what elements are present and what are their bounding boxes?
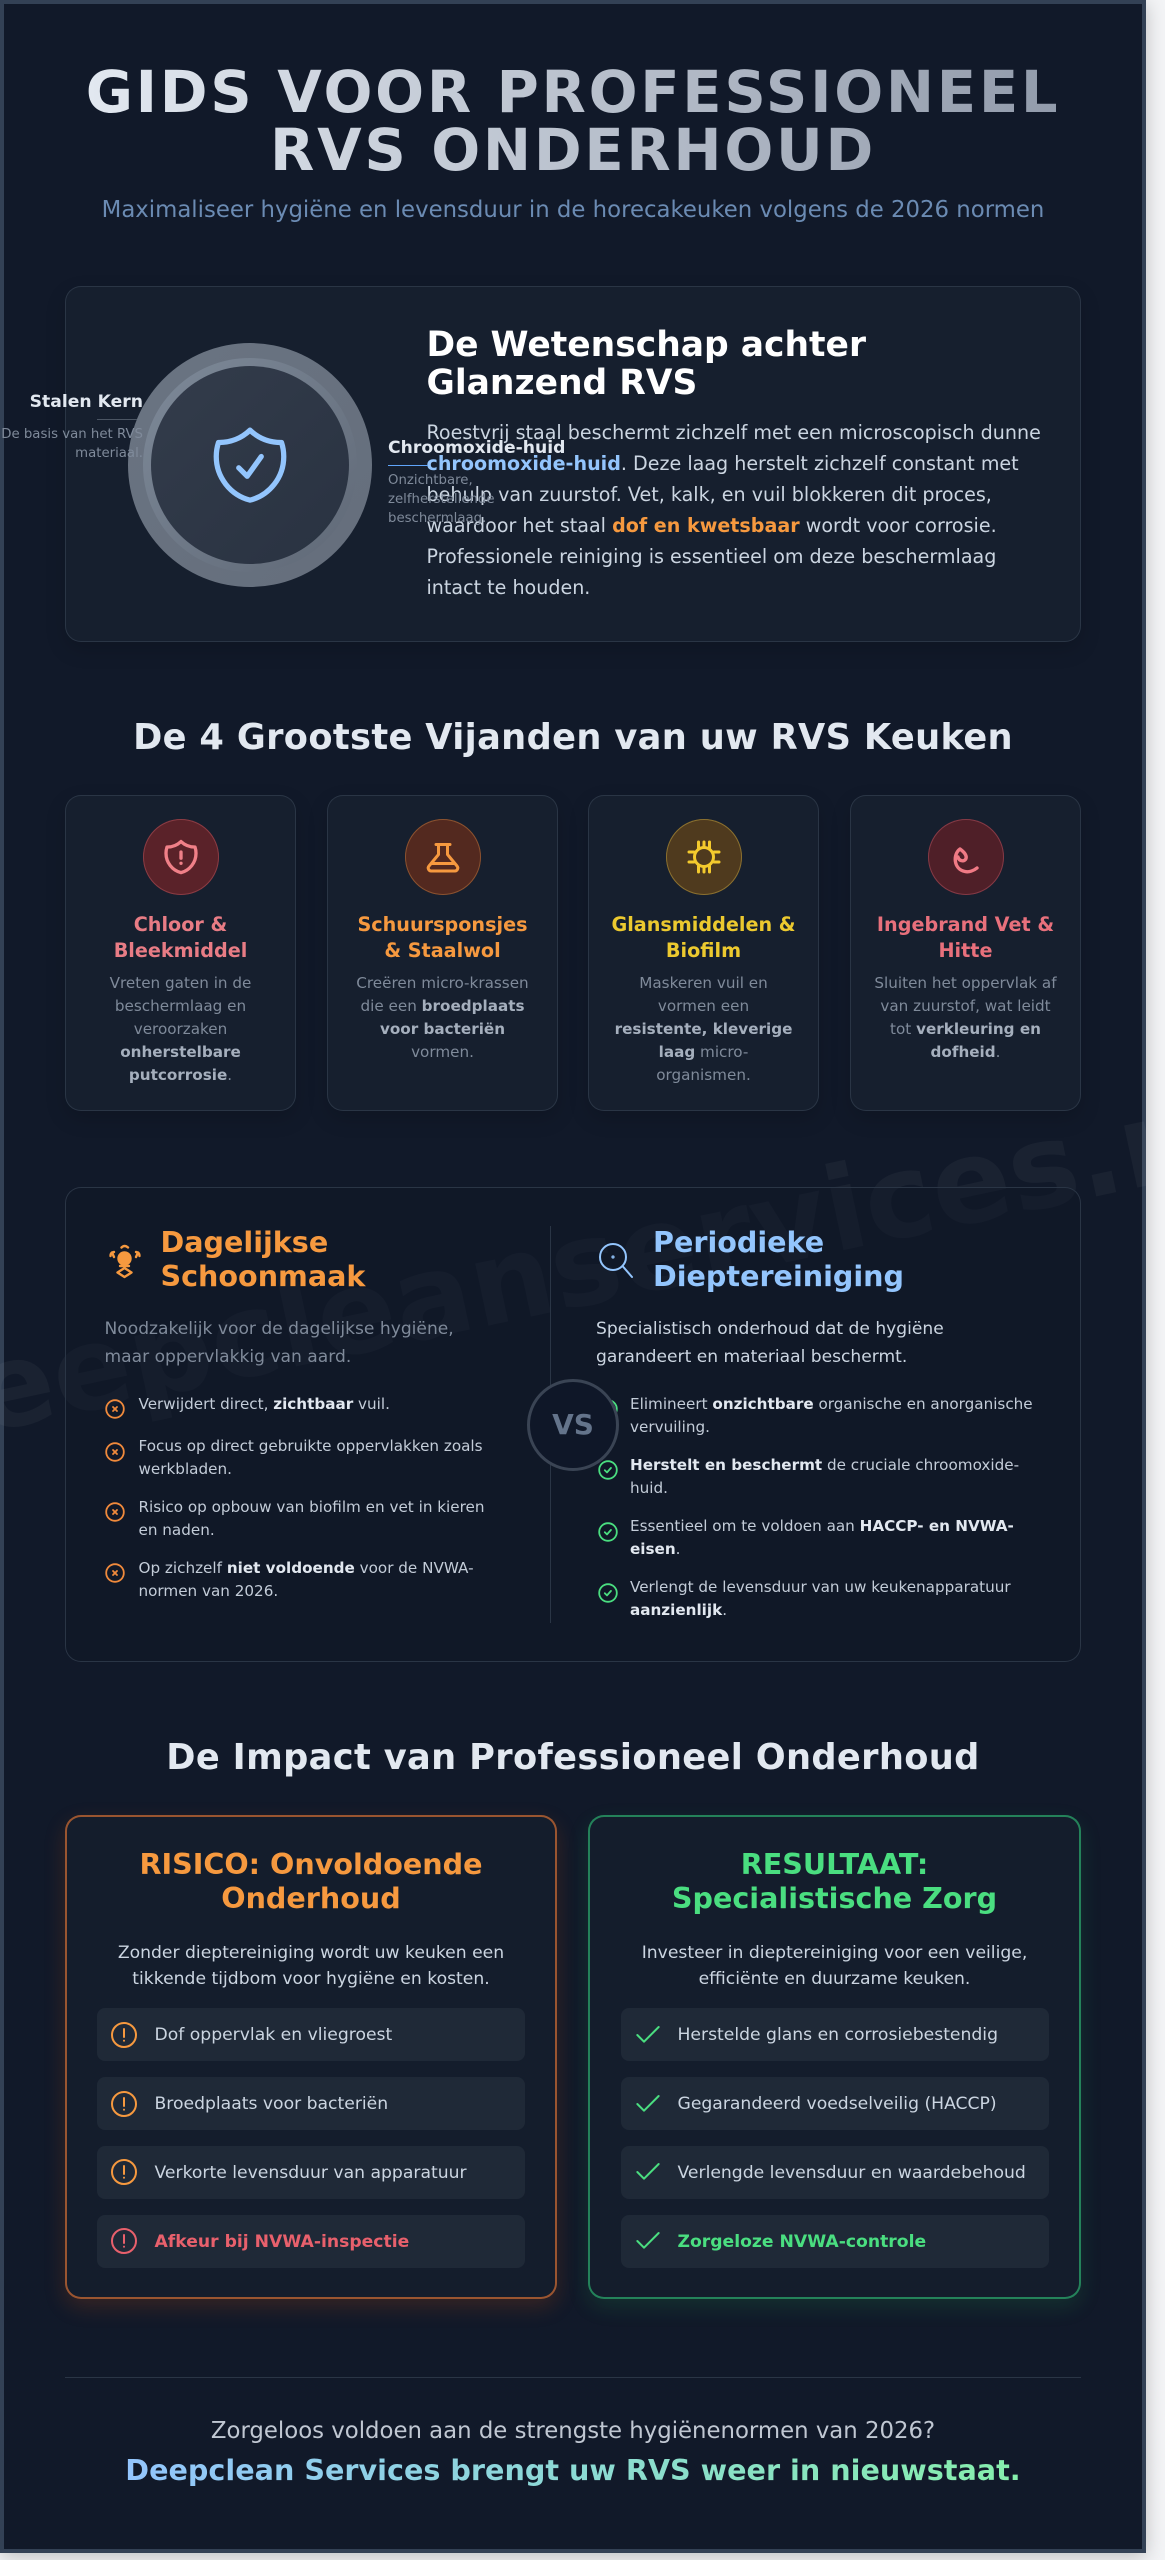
card title: & Staalwol	[384, 939, 501, 962]
item: Herstelt en beschermt de cruciale chroomoxide-	[630, 1456, 1019, 1474]
heading: science	[426, 325, 866, 402]
card: schuursponsjes	[327, 795, 558, 1111]
text: risico	[118, 1942, 504, 1989]
card title: Chloor &	[134, 913, 227, 936]
card title	[114, 913, 247, 962]
item	[621, 2008, 1049, 2061]
item	[97, 2214, 525, 2268]
card text	[615, 974, 792, 1084]
item: aanzienlijk.	[630, 1601, 727, 1619]
text: science: waardoor het staal dof en kwetsbaar wordt voor corrosie.	[426, 514, 997, 537]
card text	[110, 974, 251, 1084]
label: stalen kern	[1, 392, 143, 461]
list: dagelijkse	[105, 1394, 485, 1600]
item: normen van 2026.	[138, 1582, 278, 1600]
card: chloor	[65, 795, 296, 1111]
panel: risico	[65, 1815, 557, 2299]
text: periodieke	[596, 1319, 944, 1366]
item: Focus op direct gebruikte oppervlakken zoals	[138, 1436, 483, 1454]
card title: Glansmiddelen &	[611, 913, 796, 936]
item	[105, 1498, 485, 1538]
item	[621, 2146, 1049, 2198]
item	[105, 1394, 390, 1419]
title: GIDS VOOR PROFESSIONEEL	[86, 59, 1060, 126]
heading: resultaat: Specialistische Zorg	[672, 1881, 997, 1915]
card title: Bleekmiddel	[114, 939, 247, 962]
item: Herstelde glans en corrosiebestendig	[678, 2025, 998, 2045]
icon: daily clean	[109, 1244, 141, 1278]
heading: dagelijkse: Dagelijkse	[160, 1225, 328, 1259]
text: resultaat: efficiënte en duurzame keuken.	[699, 1969, 970, 1989]
text: dagelijkse: maar oppervlakkig van aard.	[104, 1346, 351, 1366]
label: chroomoxide-huid: zelfherstellende	[388, 492, 495, 507]
item	[621, 2214, 1049, 2268]
item: vervuiling.	[630, 1418, 710, 1436]
card text: voor bacteriën	[380, 1020, 505, 1038]
heading: resultaat	[672, 1847, 997, 1915]
card text: laag micro-	[659, 1043, 748, 1061]
heading: risico	[139, 1847, 483, 1915]
text: risico: Zonder dieptereiniging wordt uw keuken een	[118, 1942, 504, 1962]
item	[598, 1456, 1019, 1496]
title	[86, 59, 1060, 184]
text: resultaat: Investeer in dieptereiniging voor een veilige,	[642, 1942, 1027, 1962]
item	[105, 1558, 474, 1600]
diagram: steel layers	[1, 343, 565, 587]
card text: dofheid.	[931, 1043, 1000, 1061]
item	[598, 1517, 1014, 1558]
item: en naden.	[138, 1520, 215, 1538]
card: glansmiddelen	[588, 795, 819, 1111]
text: resultaat	[642, 1942, 1027, 1989]
heading: periodieke	[653, 1225, 904, 1293]
panel: science	[65, 286, 1081, 642]
item: Dof oppervlak en vliegroest	[154, 2025, 392, 2045]
list: periodieke	[598, 1394, 1033, 1619]
steel disc with shield	[128, 343, 372, 587]
text: periodieke: garandeert en materiaal beschermt.	[596, 1346, 907, 1366]
heading: resultaat: RESULTAAT:	[741, 1847, 928, 1881]
text: risico: tikkende tijdbom voor hygiëne en kosten.	[132, 1969, 490, 1989]
heading: periodieke: Periodieke	[653, 1225, 824, 1259]
heading: risico: RISICO: Onvoldoende	[139, 1847, 483, 1881]
item	[612, 1394, 1033, 1436]
card text: tot verkleuring en	[890, 1020, 1041, 1038]
footer call to action: Deepclean Services brengt uw RVS weer in nieuwstaat.	[125, 2453, 1021, 2487]
heading: risico: Onderhoud	[221, 1881, 401, 1915]
card: ingebrand vet	[850, 795, 1081, 1111]
card text	[874, 974, 1057, 1061]
label: stalen kern: Stalen Kern	[30, 392, 143, 412]
heading: science: Glanzend RVS	[426, 362, 697, 402]
panel: comparison	[65, 1187, 1081, 1662]
item: huid.	[630, 1478, 668, 1496]
heading: dagelijkse	[160, 1225, 366, 1293]
heading: periodieke: Dieptereiniging	[653, 1259, 904, 1293]
card title: Ingebrand Vet &	[877, 913, 1054, 936]
item	[621, 2077, 1049, 2130]
card title	[611, 913, 796, 962]
label: chroomoxide-huid: Onzichtbare,	[388, 473, 473, 488]
text: dagelijkse: Noodzakelijk voor de dagelijkse hygiëne,	[104, 1319, 454, 1339]
item: Verwijdert direct, zichtbaar vuil.	[138, 1394, 390, 1412]
item: Elimineert onzichtbare organische en anorganische	[630, 1394, 1033, 1412]
text: dagelijkse	[104, 1319, 454, 1366]
item: Verkorte levensduur van apparatuur	[154, 2162, 467, 2182]
heading: vijanden: De 4 Grootste Vijanden van uw RVS Keuken	[133, 717, 1013, 758]
card text: van zuurstof, wat leidt	[880, 997, 1051, 1015]
label: chroomoxide-huid	[388, 438, 565, 526]
icon: sun	[666, 819, 742, 895]
heading: dagelijkse: Schoonmaak	[160, 1259, 365, 1293]
item: eisen.	[630, 1540, 680, 1558]
text: periodieke: Specialistisch onderhoud dat de hygiëne	[596, 1319, 944, 1339]
VS badge	[527, 1379, 619, 1471]
card text: vormen.	[411, 1043, 474, 1061]
item	[97, 2146, 525, 2198]
text: science: behulp van zuurstof. Vet, kalk, en vuil blokkeren dit proces,	[426, 483, 992, 506]
text: science: intact te houden.	[426, 576, 590, 599]
text: science: chroomoxide-huid. Deze laag herstelt zichzelf constant met	[426, 452, 1019, 475]
item	[97, 2077, 525, 2130]
card text: organismen.	[656, 1066, 751, 1084]
item: werkbladen.	[138, 1460, 232, 1478]
icon: magnifier	[599, 1243, 633, 1278]
item: Essentieel om te voldoen aan HACCP- en NVWA-	[630, 1517, 1014, 1535]
label: chroomoxide-huid: Chroomoxide-huid	[388, 438, 565, 458]
card title	[357, 913, 528, 962]
item: Broedplaats voor bacteriën	[154, 2094, 388, 2114]
item: Gegarandeerd voedselveilig (HACCP)	[678, 2094, 997, 2114]
card text: Creëren micro-krassen	[356, 974, 529, 992]
card text: die een broedplaats	[360, 997, 525, 1015]
item: Afkeur bij NVWA-inspectie	[154, 2232, 409, 2252]
card title	[877, 913, 1054, 962]
text: science: Roestvrij staal beschermt zichzelf met een microscopisch dunne	[426, 421, 1041, 444]
card title: Biofilm	[666, 939, 741, 962]
item: Zorgeloze NVWA-controle	[678, 2232, 926, 2252]
subtitle: Maximaliseer hygiëne en levensduur in de horecakeuken volgens de 2026 normen	[102, 197, 1044, 223]
title: RVS ONDERHOUD	[270, 117, 876, 184]
card title: Schuursponsjes	[357, 913, 528, 936]
item: Risico op opbouw van biofilm en vet in kieren	[138, 1498, 485, 1516]
icon: shield warning	[142, 819, 218, 895]
card text: beschermlaag en	[115, 997, 246, 1015]
label: stalen kern: De basis van het RVS	[1, 427, 143, 442]
card title: Hitte	[938, 939, 992, 962]
card text	[356, 974, 529, 1061]
card text: onherstelbare	[120, 1043, 241, 1061]
card text: Maskeren vuil en	[639, 974, 768, 992]
card text: putcorrosie.	[129, 1066, 232, 1084]
icon: flask	[404, 819, 480, 895]
item: Verlengt de levensduur van uw keukenapparatuur	[630, 1578, 1011, 1596]
card text: resistente, kleverige	[615, 1020, 792, 1038]
item	[598, 1578, 1011, 1619]
heading: impact: De Impact van Professioneel Onderhoud	[166, 1736, 980, 1778]
text: science: Professionele reiniging is essentieel om deze beschermlaag	[426, 545, 996, 568]
label: stalen kern: materiaal.	[75, 446, 143, 461]
card text: Vreten gaten in de	[110, 974, 251, 992]
text: science	[426, 421, 1041, 599]
item	[105, 1436, 483, 1478]
card text: Sluiten het oppervlak af	[874, 974, 1057, 992]
footer question: Zorgeloos voldoen aan de strengste hygiënenormen van 2026?	[211, 2418, 935, 2444]
item	[97, 2008, 525, 2061]
icon: flame	[928, 819, 1004, 895]
card text: veroorzaken	[134, 1020, 227, 1038]
item: Op zichzelf niet voldoende voor de NVWA-	[138, 1558, 474, 1576]
heading: science: De Wetenschap achter	[426, 325, 866, 365]
VS badge: VS	[552, 1408, 594, 1441]
label: chroomoxide-huid: beschermlaag.	[388, 511, 486, 526]
panel: resultaat	[588, 1815, 1081, 2299]
item: Verlengde levensduur en waardebehoud	[678, 2162, 1026, 2182]
card text: vormen een	[658, 997, 749, 1015]
